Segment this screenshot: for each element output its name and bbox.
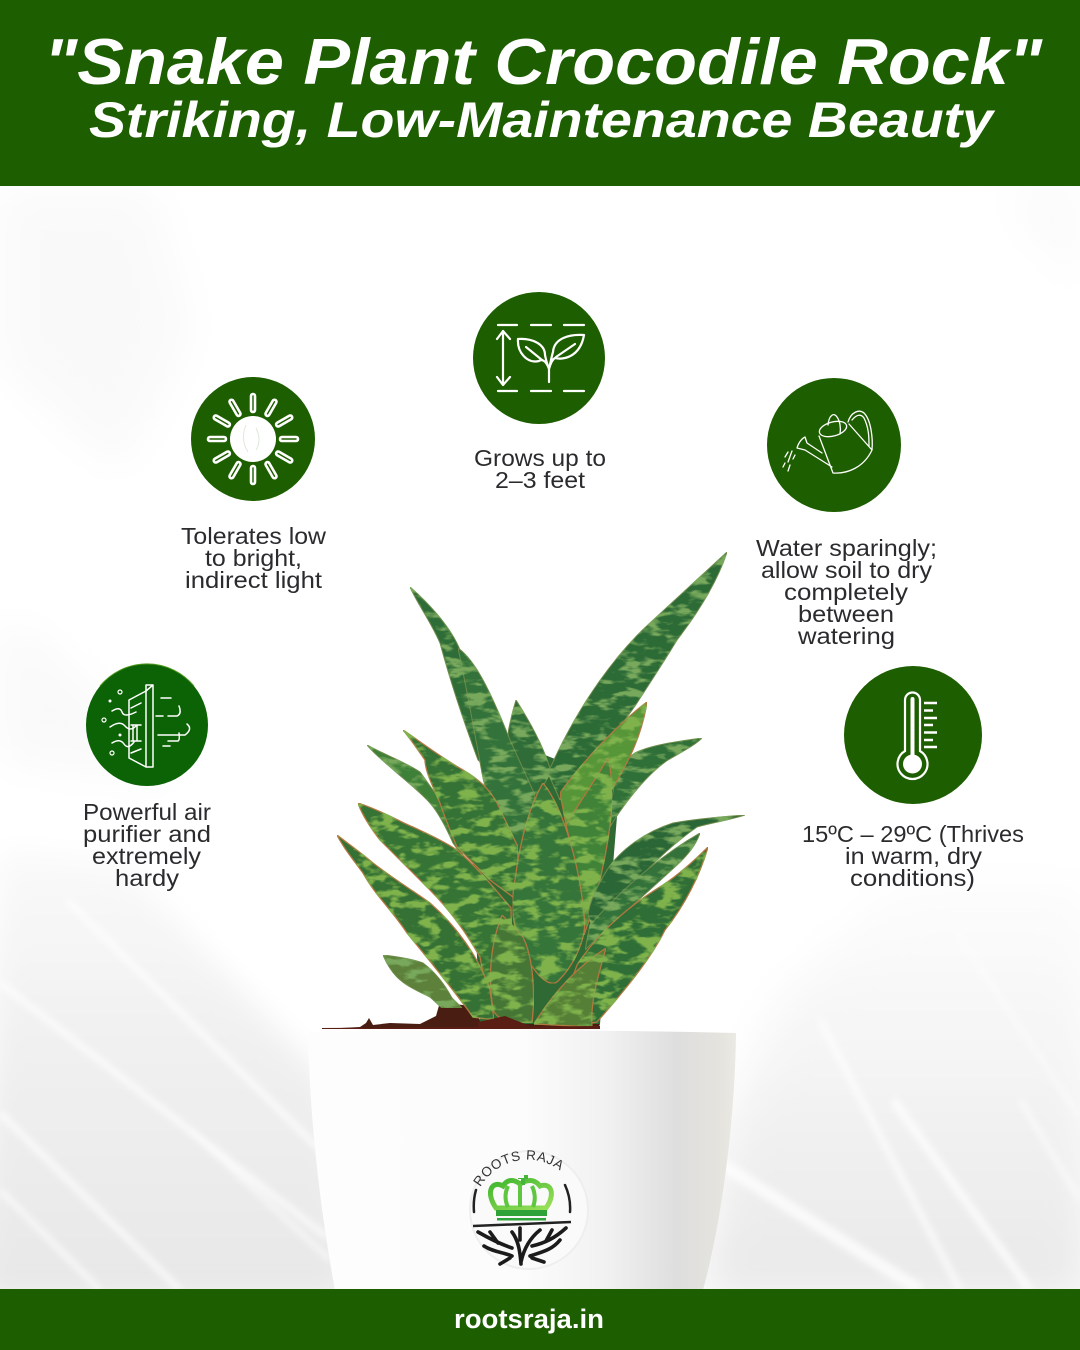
feature: watering (756, 378, 937, 649)
far left leaf (337, 835, 494, 1020)
pot (308, 1030, 736, 1290)
soil crumbs (322, 1016, 600, 1029)
leaf behind left (367, 745, 465, 860)
bright leaf (560, 702, 647, 835)
label: extremely (92, 843, 201, 869)
roots (478, 1228, 566, 1264)
label: completely (784, 579, 908, 605)
header banner (0, 0, 1080, 186)
title: "Snake Plant Crocodile Rock" (44, 25, 1043, 98)
label: 2–3 feet (495, 467, 585, 493)
bottom left leaf (383, 955, 462, 1008)
website: rootsraja.in (454, 1304, 604, 1334)
label: to bright, (205, 545, 302, 571)
label: indirect light (185, 567, 323, 593)
plant core (470, 745, 620, 1024)
back tall leaf left (410, 587, 492, 772)
right back leaf (605, 738, 702, 835)
long left leaf (358, 803, 512, 1000)
label: 15ºC – 29ºC (Thrives (802, 821, 1024, 847)
icon: air filter (86, 664, 208, 786)
snake plant (322, 552, 745, 1029)
label: watering (797, 623, 895, 649)
label: hardy (115, 865, 179, 891)
centre big leaf (513, 783, 585, 983)
subtitle: Striking, Low-Maintenance Beauty (89, 92, 995, 148)
small centre bottom leaf (490, 915, 534, 1023)
label: between (798, 601, 894, 627)
right lower leaf middle (585, 833, 700, 950)
icon: sun (191, 377, 315, 501)
label: Water sparingly; (756, 535, 937, 561)
footer banner (0, 1289, 1080, 1350)
back centre leaf (508, 700, 551, 800)
crown (490, 1175, 551, 1220)
icon: thermometer (844, 666, 982, 804)
feature: light (181, 377, 327, 593)
soil (322, 1002, 600, 1029)
label (474, 445, 606, 493)
logo sticker (469, 1150, 572, 1270)
upright centre right leaf (566, 758, 612, 935)
leaf tall left front (458, 648, 535, 860)
right lower leaf top (588, 815, 745, 935)
icon: plant height (473, 292, 605, 424)
brand arc text: ROOTS RAJA (473, 1150, 562, 1186)
label: conditions) (850, 865, 975, 891)
bottom right leaf (534, 948, 606, 1027)
label: Grows up to (474, 445, 606, 471)
label: in warm, dry (845, 843, 982, 869)
label: Tolerates low (181, 523, 327, 549)
right lower leaf front (568, 847, 708, 1024)
side marks (474, 1185, 570, 1212)
label: allow soil to dry (761, 557, 932, 583)
feature: temperature (802, 666, 1024, 891)
tall right leaf (548, 552, 727, 800)
icon: watering can (767, 378, 901, 512)
label (83, 799, 211, 891)
feature: mature height (473, 292, 606, 493)
label: Powerful air (83, 799, 211, 825)
label: purifier and (83, 821, 211, 847)
label (181, 523, 327, 593)
label (756, 535, 937, 649)
label (802, 821, 1024, 891)
feature: air purifier (83, 664, 211, 891)
wide left leaf (403, 730, 518, 900)
